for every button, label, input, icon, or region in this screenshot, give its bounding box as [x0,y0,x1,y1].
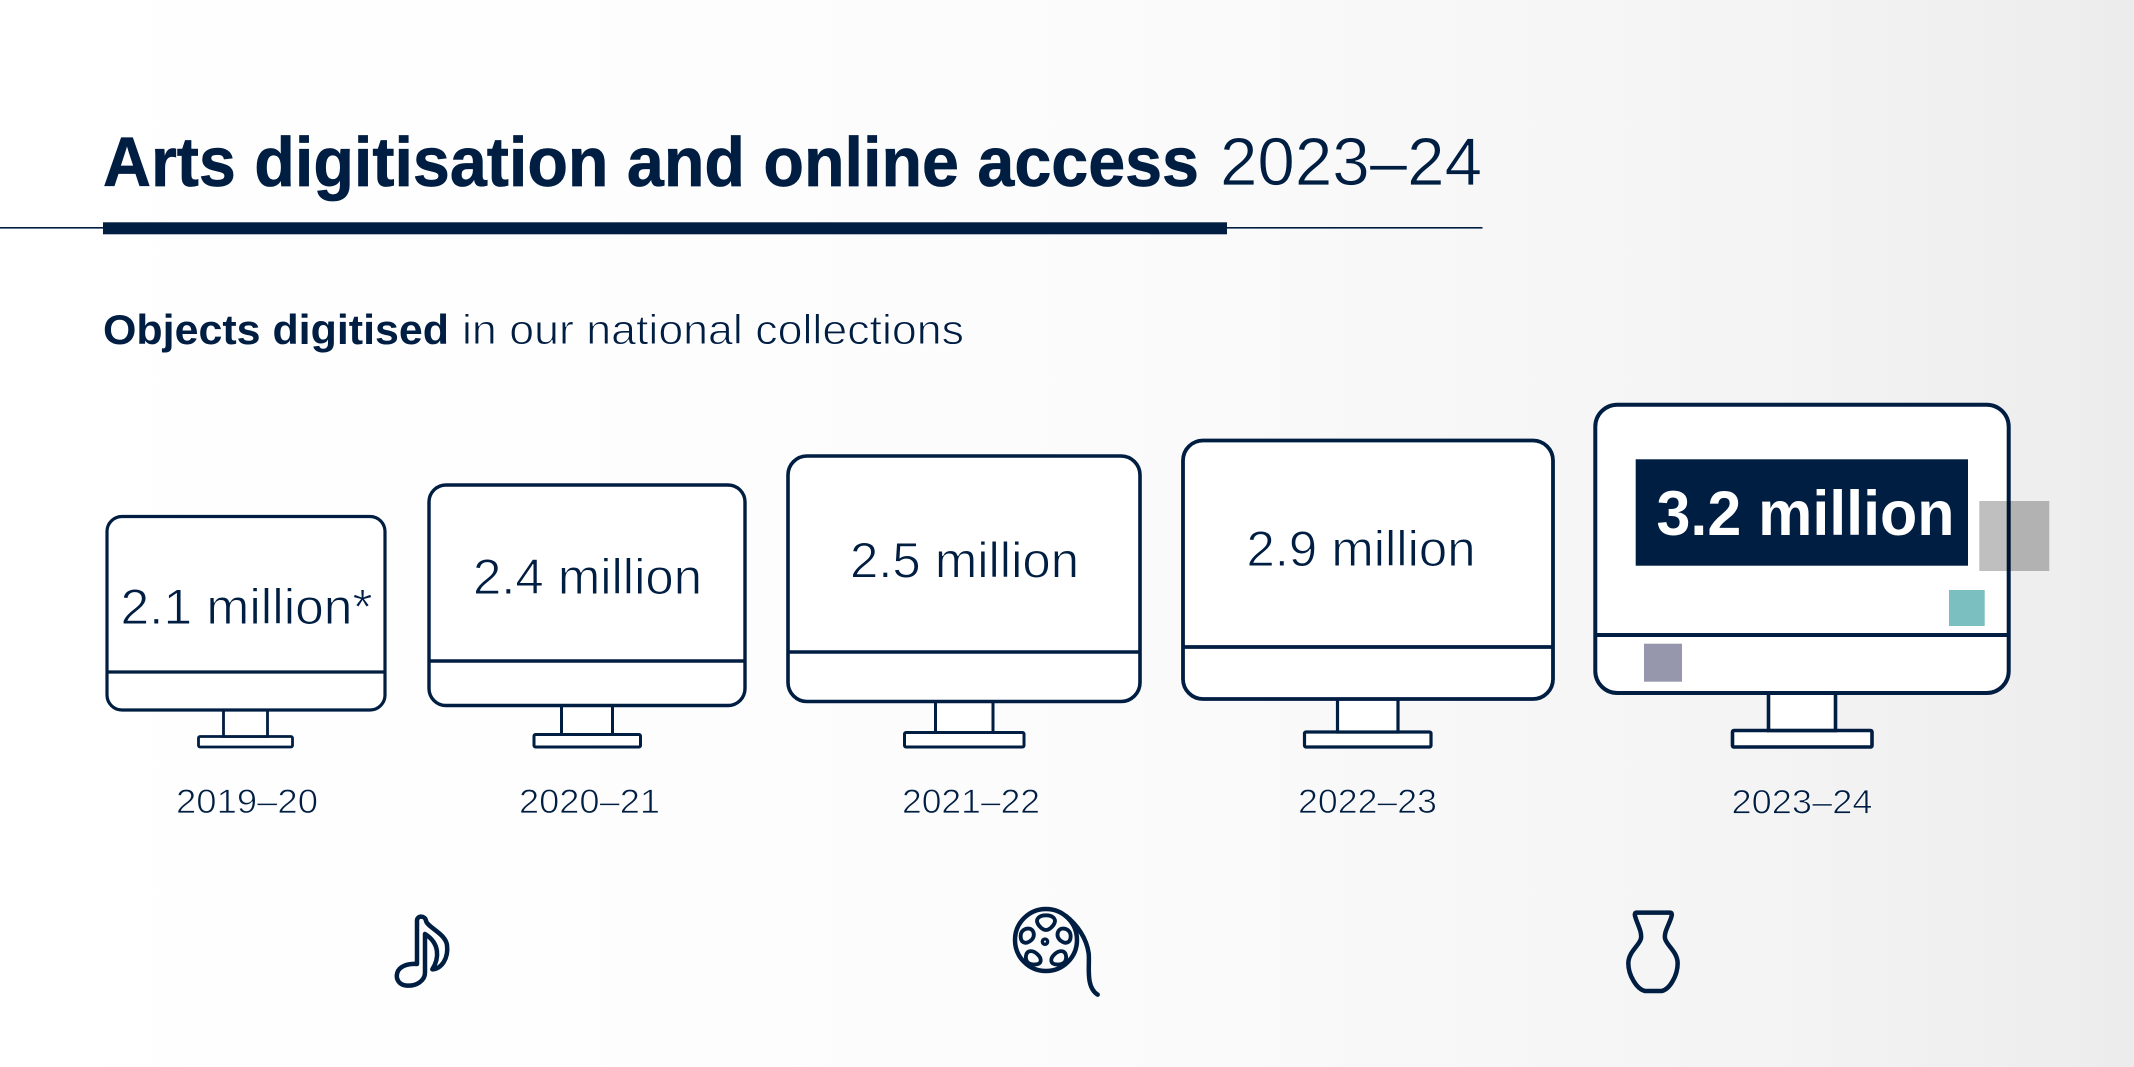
year label: 2021–22: 2021–22 [902,783,1040,821]
subheading: Objects digitised [103,306,449,353]
monitor: 2019–20 [107,516,385,747]
monitor: 2021–22 [788,456,1140,747]
decorative square: purple [1644,644,1682,682]
title rule [0,222,1482,234]
decorative square: grey [1979,501,2049,571]
monitor: 2020–21 [429,485,745,747]
value: 3.2 million: 3.2 million [1656,479,1954,549]
icon: film reel [1015,909,1098,995]
subheading [103,306,964,353]
value: 2.9 million: 2.9 million [1246,521,1476,577]
value: 2.5 million: 2.5 million [850,532,1079,588]
title: Arts digitisation and online access [103,123,1199,201]
value: 2.4 million: 2.4 million [473,549,702,605]
monitor: 2022–23 [1183,440,1553,747]
subheading: in our national collections [462,306,964,353]
icon: vase [1628,913,1678,991]
value: 2.1 million: 2.1 million* [120,579,372,635]
decorative square: teal [1949,590,1985,626]
year label: 2022–23: 2022–23 [1298,783,1437,821]
value highlight box [1636,459,1968,566]
year label: 2020–21: 2020–21 [519,783,660,821]
title: 2023–24 [1220,124,1482,200]
year label: 2023–24: 2023–24 [1732,784,1872,822]
icon: music note [397,917,447,986]
year label: 2019–20: 2019–20 [176,783,318,821]
monitor: 2023–24 [1595,405,2009,747]
